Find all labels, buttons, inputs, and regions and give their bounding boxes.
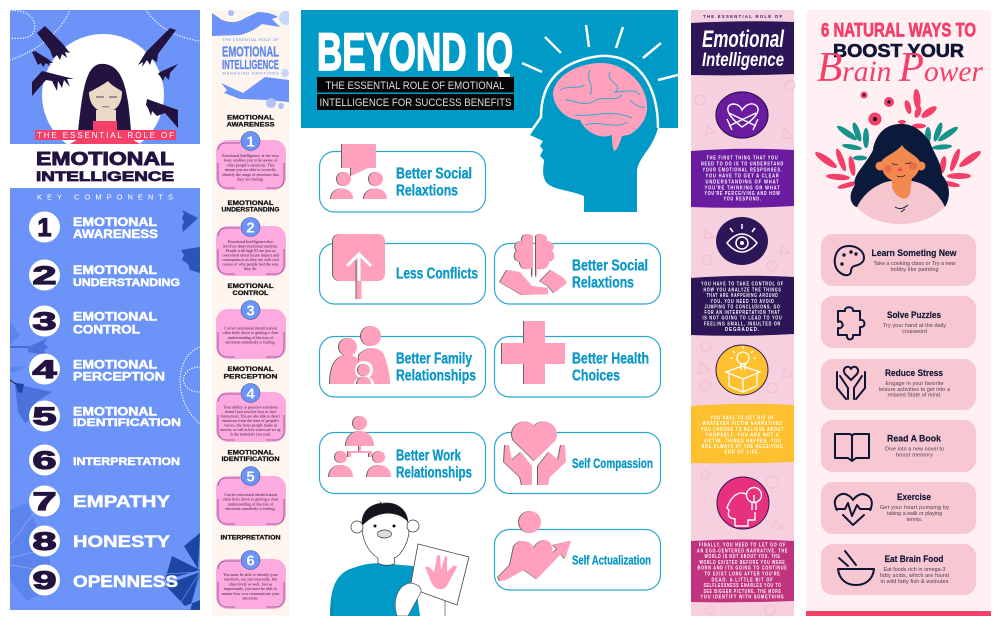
icon: head with idea <box>717 477 769 529</box>
item 2: 2 <box>32 262 56 290</box>
text block: yellow: YOURSELF. YOU ARE NOT A <box>706 433 780 439</box>
section 5: 5 <box>246 468 255 486</box>
text block: yellow: WHATEVER VICTIM NARRATIVES <box>702 421 782 427</box>
text block: purple: THE FIRST THING THAT YOU <box>706 156 778 162</box>
item 4: EMOTIONAL <box>73 358 157 372</box>
text block: magenta: WORLD EXISTED BEFORE YOU WERE <box>700 560 786 566</box>
card: read a book: boost memory <box>896 452 933 458</box>
card: exercise: Exercise <box>897 492 931 502</box>
section 1: means you are able to correctly <box>225 167 277 172</box>
section 5: Correct emotional identification <box>224 492 277 497</box>
section 1: AWARENESS <box>226 122 274 128</box>
text block: magenta: WORLD IS NOT ABOUT YOU. THE <box>704 554 780 560</box>
panel: 6 natural ways <box>806 10 991 616</box>
section 1: identify the range of emotions that <box>222 172 280 177</box>
card: better family relationships <box>320 326 486 397</box>
section 3: CONTROL <box>232 290 269 297</box>
section 1: least, enables you to be aware of <box>224 158 278 164</box>
card: better health choices <box>494 321 660 397</box>
item 3: CONTROL <box>73 322 140 336</box>
text block: yellow <box>691 404 794 463</box>
section 4: emotions from the tone of people's <box>222 418 279 423</box>
section 2: consequences as they are with root <box>222 257 280 262</box>
card: learn something new: Learn Someting New <box>872 248 957 258</box>
section 2: they do. <box>244 266 257 271</box>
illustration: head with brain <box>530 56 658 212</box>
text block: purple: YOU'RE THINKING OR WHAT <box>704 186 780 192</box>
item 5 <box>29 400 181 432</box>
section 3: often boils down to getting a clear <box>223 330 279 335</box>
title: BOOST YOUR <box>833 41 964 61</box>
item 7: EMPATHY <box>73 492 171 511</box>
text block: yellow: END OF LIFE. <box>724 450 760 456</box>
section 6: INTERPRETATION <box>220 534 281 542</box>
card: eat brain food <box>821 544 976 595</box>
item 8: HONESTY <box>73 532 171 551</box>
text block: purple: YOUR EMOTIONAL RESPONSES. <box>702 168 782 174</box>
card: better health choices: Choices <box>572 368 620 384</box>
top label: THE ESSENTIAL ROLE OF <box>703 14 782 19</box>
item 8: 8 <box>32 528 57 556</box>
card: better family relationships: Better Family <box>396 350 472 368</box>
item 2 <box>29 260 180 290</box>
text block: purple: YOU HAVE TO GET A CLEAR <box>706 174 780 180</box>
card: better social relaxtions with brain icon <box>494 234 660 304</box>
card: better social relaxtions <box>320 144 486 212</box>
item 4: PERCEPTION <box>73 370 165 384</box>
section 6: master how you communicate your <box>222 591 280 596</box>
card: better work relationships: Better Work <box>396 448 461 464</box>
card: exercise: taking a walk or playing <box>887 511 942 517</box>
section 4: PERCEPTION <box>224 374 278 380</box>
text block: magenta: SEE BIGGER PICTURE. THE MORE <box>704 589 782 595</box>
key components heading: KEY COMPONENTS <box>37 192 173 202</box>
item 3 <box>29 306 157 336</box>
icon: child <box>357 364 371 384</box>
card: better social relaxtions with brain icon: Better Social <box>572 258 648 274</box>
card: exercise: tennis. <box>906 517 922 523</box>
title band <box>691 21 794 75</box>
item 9 <box>29 564 178 596</box>
card: solve puzzles: Solve Puzzles <box>887 310 941 320</box>
section 5: IDENTIFICATION <box>222 456 280 463</box>
text block: magenta: FINALLY, YOU NEED TO LET GO OF <box>699 542 786 548</box>
text block: purple: YOU'RE PERCEIVING AND HOW <box>704 191 780 197</box>
item 9: OPENNESS <box>73 572 178 591</box>
text block: navy: YOU. YOU NEED TO AVOID <box>710 299 774 305</box>
section 3: emotions somebody is feeling. <box>225 340 276 345</box>
text block: navy: DEGRADED. <box>725 327 760 333</box>
section 5: EMOTIONAL <box>228 450 274 456</box>
card: reduce stress: leisure activities to get into a <box>879 387 950 393</box>
card: eat brain food: Eat foods rich in omega-3 <box>884 567 946 573</box>
section 1: 1 <box>246 134 255 150</box>
section 6: emotions, not just internally, but <box>224 577 278 583</box>
section 2 <box>216 200 286 276</box>
header banner <box>301 10 678 128</box>
section 6: You must be able to identify your <box>223 572 279 577</box>
card: read a book: Dive into a new novel to <box>885 446 944 452</box>
text block: magenta: AN EGO-CENTERED NARRATIVE. THE <box>697 548 788 554</box>
text block: navy: FEELING SMALL, INSULTED OR <box>704 321 781 327</box>
section 2: concerned about future impact and <box>222 252 279 258</box>
hero illustration: woman surrounded by hands <box>10 10 200 156</box>
item 3: EMOTIONAL <box>73 310 157 324</box>
section 2: involves deep emotional analysis. <box>223 244 278 248</box>
section 1: they are feeling. <box>237 176 264 182</box>
title band: Intelligence <box>702 50 784 71</box>
text block: magenta: SELFLESSNESS ENABLES YOU TO <box>704 583 782 589</box>
section 6: 6 <box>246 552 255 570</box>
section 4: movies, as well as how scenes are set up <box>220 427 280 433</box>
text block: yellow: ARE ALWAYS AT THE RECEIVING <box>702 444 784 450</box>
card: self actualization <box>494 511 660 590</box>
section 1 <box>216 114 286 190</box>
card: less conflicts: Less Conflicts <box>396 266 478 282</box>
section 5: emotions somebody is feeling. <box>225 506 276 511</box>
item 1: AWARENESS <box>73 227 158 241</box>
illustration: bottom hand <box>221 69 289 109</box>
section 3 <box>216 283 286 359</box>
card: learn something new <box>821 234 976 286</box>
text block: magenta: TO EXIST LONG AFTER YOU'RE <box>704 572 780 578</box>
text block: purple: UNDERSTANDING OF WHAT <box>706 180 780 186</box>
illustration: boy holding paper with hand <box>330 500 469 616</box>
panel: role of emotional intelligence script <box>691 10 795 616</box>
panel: beyond iq <box>301 10 678 616</box>
card: exercise: Get your heart pumping by <box>880 505 949 511</box>
item 4 <box>29 354 165 384</box>
card: learn something new: hobby like painting <box>890 267 938 273</box>
card: reduce stress <box>821 359 976 410</box>
section 2: Emotional Intelligence also <box>228 239 273 244</box>
card: less conflicts <box>320 234 486 304</box>
title: emotional intelligence: INTELLIGENCE <box>222 57 279 72</box>
section 6 <box>216 534 286 609</box>
title: emotional intelligence: THE ESSENTIAL ROLE OF <box>222 37 279 42</box>
item 4: 4 <box>32 356 57 384</box>
item 7: 7 <box>32 488 56 516</box>
text block: yellow: VICTIM. THINGS HAPPEN. YOU <box>704 438 782 444</box>
card: self compassion <box>494 421 660 494</box>
text block: navy: IS NOT GOING TO LEAD TO YOU <box>702 316 782 322</box>
item 1 <box>29 212 158 242</box>
item 2: UNDERSTANDING <box>73 277 180 289</box>
card: solve puzzles <box>821 296 976 348</box>
icon: eye <box>716 217 768 265</box>
section 4 <box>216 366 286 442</box>
section 4: interactions. You are also able to detect <box>221 414 281 418</box>
text block: purple <box>691 149 794 208</box>
section 3: EMOTIONAL <box>228 283 274 290</box>
card: better work relationships <box>320 416 486 494</box>
card: self actualization: Self Actualization <box>572 552 651 568</box>
section 5: often boils down to getting a clear <box>223 497 279 502</box>
section 4: voices, the faces people make in <box>224 422 277 428</box>
title: emotional intelligence: MANAGING EMOTIONS <box>222 72 279 76</box>
item 6 <box>29 444 180 476</box>
item 7 <box>29 486 171 516</box>
section 2: UNDERSTANDING <box>222 206 280 214</box>
icon: self hug heart <box>716 92 768 138</box>
section 4: in the materials you read. <box>230 432 271 436</box>
item 6: INTERPRETATION <box>73 456 180 468</box>
title band: Emotional <box>702 26 785 53</box>
illustration: woman with leaves <box>813 89 983 224</box>
section 4: EMOTIONAL <box>228 366 274 373</box>
heading: emotional intelligence: EMOTIONAL <box>36 149 174 169</box>
card: reduce stress: Engage in your favorite <box>886 381 944 387</box>
text block: navy <box>691 276 794 336</box>
text block: purple: YOU RESPOND. <box>724 196 762 202</box>
text block: navy: JUMPING TO CONCLUSIONS. GO <box>704 305 780 311</box>
icon: flowers <box>860 92 894 126</box>
text block: navy: THAT ARE HAPPENING AROUND <box>706 293 778 299</box>
item 5: EMOTIONAL <box>73 404 157 418</box>
illustration: top hand <box>212 10 293 36</box>
section 3: Correct emotional identification <box>224 326 277 330</box>
item 1: EMOTIONAL <box>73 215 157 229</box>
card: learn something new: Take a cooking class or Try a new <box>874 261 956 267</box>
text block: yellow: YOU HAVE TO GET RID OF <box>710 416 774 422</box>
item 5: IDENTIFICATION <box>73 417 181 429</box>
title: beyond iq: BEYOND IQ <box>317 23 513 82</box>
section 6: objectively as well. Just as <box>229 581 273 586</box>
card: better social relaxtions: Relaxtions <box>396 182 458 200</box>
section 3: 3 <box>246 302 255 320</box>
text block: magenta: BORN AND ITS GOING TO CONTINUE <box>698 566 788 572</box>
section 1: other people's emotions. This <box>227 162 275 167</box>
card: solve puzzles: crossword <box>902 329 927 335</box>
text block: magenta: DEAD. A LITTLE BIT OF <box>712 577 774 583</box>
item 5: 5 <box>32 403 57 431</box>
section 1: EMOTIONAL <box>227 114 274 122</box>
section 2: 2 <box>246 220 255 236</box>
item 2: EMOTIONAL <box>73 263 157 277</box>
item 6: 6 <box>32 447 56 475</box>
card: eat brain food: in wild fatty fish & walnutes <box>880 579 949 585</box>
text block: purple: NEED TO DO IS TO UNDERSTAND <box>701 162 784 168</box>
text block: navy: HOW YOU ANALYZE THE THINGS <box>704 287 782 293</box>
card: read a book: Read A Book <box>887 434 941 444</box>
heading: emotional intelligence <box>10 144 200 188</box>
title <box>817 20 983 91</box>
card: better family relationships: Relationships <box>396 368 476 384</box>
icon: lightbulb in box <box>716 345 768 395</box>
subtitle bars <box>317 77 514 110</box>
card: reduce stress: Reduce Stress <box>885 368 943 378</box>
item 9: 9 <box>32 567 56 595</box>
card: solve puzzles: Try your hand at the daily <box>883 323 946 329</box>
text block: navy: FOR AN INTERPRETATION THAT <box>704 310 780 316</box>
subtitle bars: INTELLIGENCE FOR SUCCESS BENEFITS <box>320 97 512 109</box>
card: eat brain food: Eat Brain Food <box>884 554 944 564</box>
item 1: 1 <box>38 214 52 242</box>
title: Brain Power <box>817 45 983 91</box>
title: emotional intelligence <box>222 37 279 76</box>
background pattern shapes <box>695 80 795 615</box>
footer bar <box>806 611 991 616</box>
section 4: Your ability to perceive emotions <box>223 404 278 410</box>
section 3: understanding of the mix of <box>228 335 274 340</box>
section 5 <box>216 450 286 526</box>
section 2: People with high EI are just as <box>225 248 276 253</box>
card: better social relaxtions with brain icon: Relaxtions <box>572 274 634 292</box>
section 1: Emotional Intelligence, at the very <box>222 153 280 159</box>
card: reduce stress: relaxed State of mind. <box>888 392 942 398</box>
card: exercise <box>821 482 976 534</box>
section 5: understanding of the mix of <box>228 501 274 506</box>
text block: yellow: YOU CHOOSE TO BELIEVE ABOUT <box>701 427 784 433</box>
decorative flowers <box>10 210 200 610</box>
item 3: 3 <box>32 308 56 336</box>
card: better social relaxtions: Better Social <box>396 166 472 182</box>
section 6: importantly, you must be able to <box>224 586 277 592</box>
subtitle bars: THE ESSENTIAL ROLE OF EMOTIONAL <box>326 80 504 92</box>
section 2: EMOTIONAL <box>228 200 274 207</box>
title: emotional intelligence: EMOTIONAL <box>222 44 279 60</box>
card: better health choices: Better Health <box>572 350 649 368</box>
section 6: emotions. <box>242 596 259 600</box>
card: self compassion: Self Compassion <box>572 456 653 471</box>
banner: the essential role of: THE ESSENTIAL ROLE OF <box>37 131 174 140</box>
item 8 <box>29 526 171 556</box>
card: read a book <box>821 420 976 472</box>
section 4: doesn't just involve face to face <box>225 409 276 414</box>
section 2: causes of why people feel the way <box>222 262 280 266</box>
rays <box>522 25 678 80</box>
card: better work relationships: Relationships <box>396 464 472 482</box>
text block: magenta <box>691 540 794 602</box>
text block: magenta: YOU IDENTIFY WITH SOMETHING <box>700 595 784 601</box>
heading: emotional intelligence: INTELLIGENCE <box>36 168 174 184</box>
text block: navy: YOU HAVE TO TAKE CONTROL OF <box>701 282 784 288</box>
section 4: 4 <box>246 386 255 402</box>
card: eat brain food: fatty acids, which are found <box>880 573 949 579</box>
panel: managing emotions <box>212 10 293 616</box>
panel: emotional intelligence key components <box>10 10 200 610</box>
